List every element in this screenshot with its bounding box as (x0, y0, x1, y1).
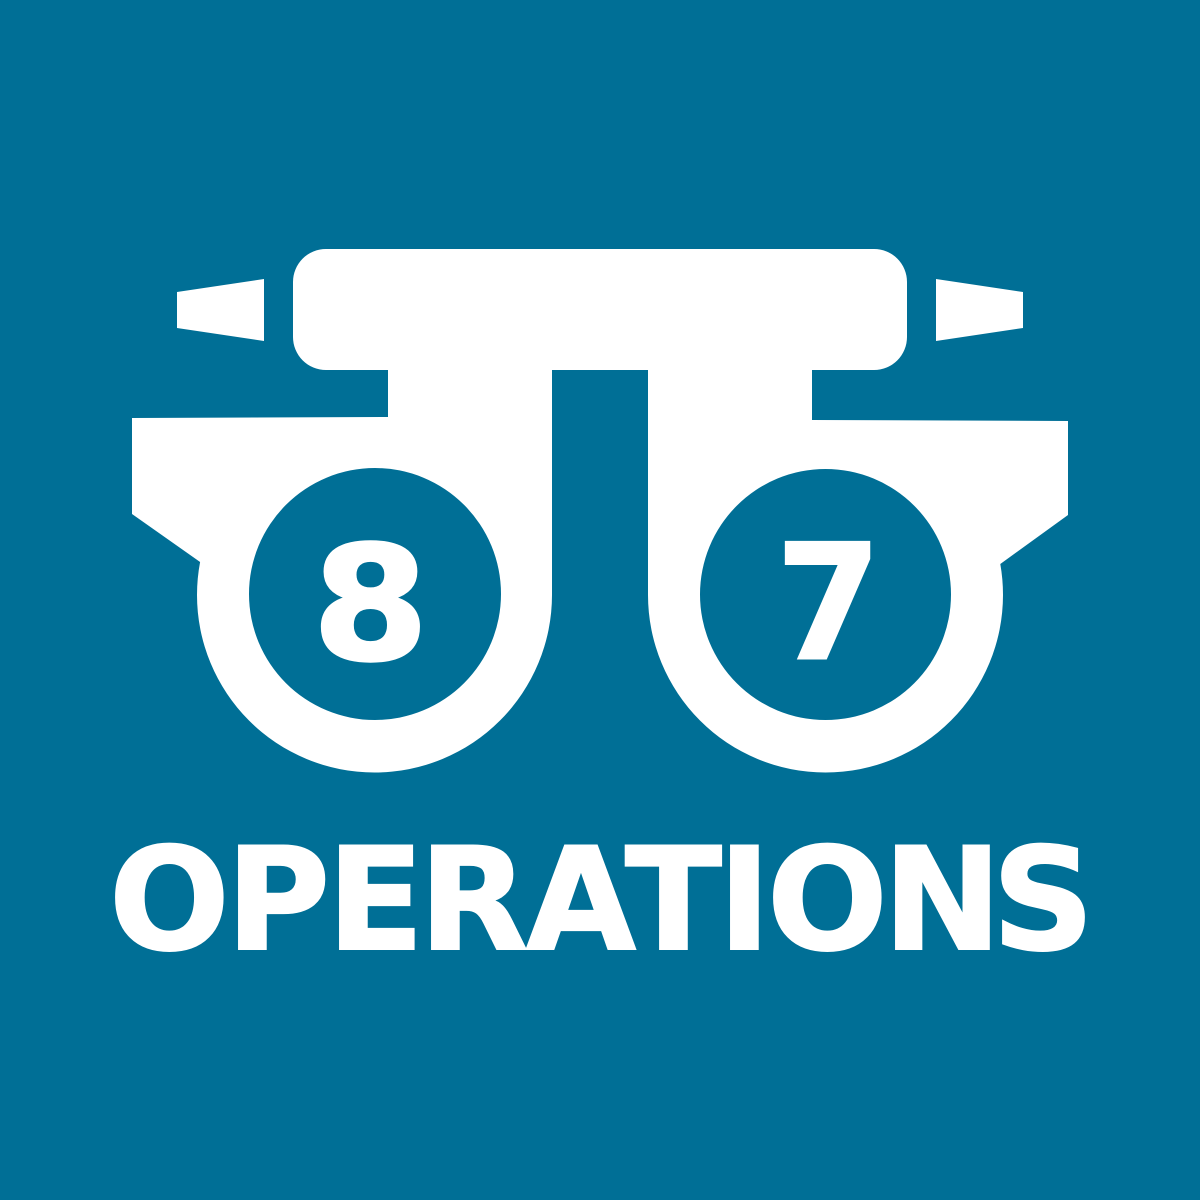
icon: phoropter (132, 249, 1068, 772)
right lens number: 7 (776, 510, 881, 696)
icon: left pointer (177, 279, 264, 341)
title: OPERATIONS (109, 818, 1094, 983)
icon: device body (132, 249, 1068, 772)
left lens number: 8 (312, 513, 429, 697)
icon: right pointer (936, 279, 1023, 341)
